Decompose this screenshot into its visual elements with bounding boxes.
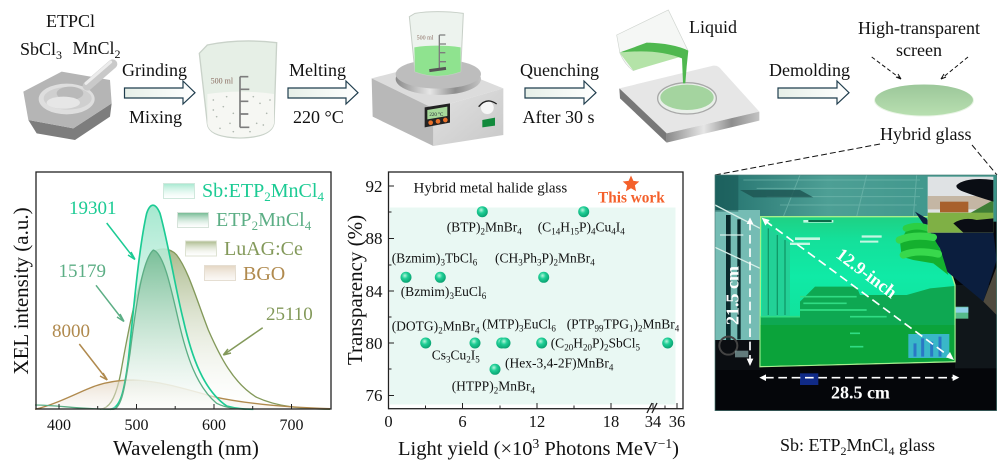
- data labels: 4: [611, 227, 616, 237]
- label: grinding: Grinding: [122, 60, 187, 80]
- arrow: demolding: [778, 81, 849, 104]
- label: hybrid glass: Hybrid glass: [880, 124, 972, 144]
- ceiling: [715, 175, 997, 222]
- x tick labels: 700: [280, 417, 304, 434]
- curve: BGO: [35, 380, 330, 409]
- data labels: 4: [475, 326, 480, 336]
- axes frame: [36, 172, 331, 409]
- data labels: (Bzmim): [392, 250, 440, 265]
- title: hybrid metal halide glass: Hybrid metal halide glass: [414, 180, 567, 196]
- x tick labels: 0: [384, 412, 393, 431]
- right dark room: [955, 285, 997, 368]
- y axis title: XEL intensity (a.u.): [9, 207, 33, 375]
- icon: pouring beaker and mold: [617, 10, 759, 143]
- panel: transparency vs light yield chart: [343, 172, 685, 460]
- arrow: quenching: [525, 81, 596, 104]
- data labels: MnBr: [443, 319, 475, 334]
- data labels: 4: [675, 323, 680, 333]
- arrow: melting: [288, 81, 358, 104]
- label: precursors: MnCl: [72, 38, 115, 58]
- x axis title: 3: [533, 436, 540, 451]
- curves: [35, 205, 330, 409]
- data labels: 15: [570, 227, 579, 237]
- arrows: value pointers: [79, 223, 263, 380]
- x tick labels: 6: [458, 412, 467, 431]
- caption: glass photo: 4: [889, 444, 895, 458]
- x ticks: [59, 404, 292, 409]
- data labels: [392, 220, 680, 396]
- label: melting: Melting: [289, 60, 346, 80]
- legend: MnCl: [258, 209, 305, 231]
- x tick labels: 600: [202, 417, 226, 434]
- x tick labels: 400: [47, 417, 71, 434]
- x tick labels: [47, 417, 304, 434]
- icon: beaker with powder: 500 ml: [211, 76, 234, 85]
- icon: hot plate with beaker: [372, 12, 503, 146]
- data labels: 5: [635, 342, 640, 352]
- data labels: TPG: [603, 316, 629, 331]
- legend: 4: [305, 218, 312, 233]
- label: quenching: Quenching: [520, 60, 599, 80]
- data labels: 3: [440, 257, 445, 267]
- label: precursors: [20, 11, 121, 62]
- callouts: intensity values: [52, 198, 313, 342]
- data labels: 6: [482, 291, 487, 301]
- data labels: (BTP): [447, 220, 480, 235]
- left wall and windows: [715, 210, 760, 343]
- data labels: SbCl: [608, 335, 636, 350]
- label: precursors: ETPCl: [46, 11, 95, 31]
- data labels: P): [542, 250, 554, 265]
- data points: [400, 206, 673, 375]
- data labels: Cs: [432, 347, 446, 362]
- label: after 30 s: After 30 s: [522, 107, 594, 127]
- data labels: 2: [466, 354, 471, 364]
- callouts: intensity values: 25110: [266, 304, 313, 325]
- legend: Sb:ETP: [202, 180, 264, 202]
- label: this work: This work: [598, 190, 665, 206]
- data labels: 3: [449, 291, 454, 301]
- legend: ETP: [216, 209, 252, 231]
- label: precursors: SbCl: [20, 39, 56, 59]
- data labels: 5: [475, 354, 480, 364]
- axes frame: [388, 172, 683, 409]
- data labels: H: [573, 335, 583, 350]
- y tick labels: 84: [366, 282, 383, 301]
- dimension labels: 21.5 cm: [722, 266, 742, 325]
- data labels: 14: [551, 227, 561, 237]
- data labels: 3: [446, 354, 451, 364]
- data labels: 2: [480, 227, 485, 237]
- inset photo: [928, 177, 993, 233]
- icon: beaker with powder: [199, 41, 277, 138]
- dimension labels: [722, 244, 901, 402]
- data labels: I: [471, 347, 476, 362]
- dimension labels: 12.9-inch: [833, 244, 901, 302]
- x axis title: Light yield (×10: [398, 438, 533, 460]
- callouts: intensity values: 19301: [69, 198, 116, 219]
- x axis title: ): [672, 438, 679, 460]
- data labels: 3: [518, 257, 523, 267]
- x tick labels: [384, 412, 685, 431]
- x axis title: Photons MeV: [539, 438, 658, 460]
- data labels: 2: [604, 342, 608, 352]
- data labels: 2: [494, 386, 498, 396]
- data labels: MnBr: [485, 220, 518, 235]
- legend: 4: [317, 189, 324, 204]
- y tick labels: [366, 177, 383, 405]
- caption: glass photo: 2: [841, 444, 847, 458]
- data labels: 20: [564, 342, 574, 352]
- data labels: (Hex-3,4-2F)MnBr: [505, 355, 609, 370]
- ticks: [388, 186, 677, 409]
- arrow heads: [747, 217, 959, 381]
- label: high-transparent screen: [858, 18, 980, 60]
- data labels: (CH: [495, 250, 518, 265]
- y tick labels: 80: [366, 334, 382, 353]
- panel: synthesis process: [20, 10, 997, 175]
- legend: BGO: [243, 263, 285, 285]
- star: this work: [623, 176, 639, 191]
- data labels: 4: [517, 227, 522, 237]
- data labels: MnBr: [558, 250, 591, 265]
- data labels: H: [560, 220, 570, 235]
- data labels: 4: [590, 257, 595, 267]
- label: high-transparent screen: screen: [896, 40, 942, 60]
- caption: glass photo: Sb: ETP: [780, 435, 841, 455]
- panel: glass photo: [715, 175, 997, 411]
- data labels: 3: [537, 257, 542, 267]
- data labels: P): [579, 220, 591, 235]
- axis break: [647, 403, 657, 413]
- legend: 2: [252, 218, 258, 233]
- icon: hot plate with beaker: 500 ml: [417, 36, 434, 42]
- data labels: (MTP): [482, 316, 519, 331]
- data labels: EuCl: [524, 316, 552, 331]
- data labels: ): [633, 316, 638, 331]
- data labels: (Bzmim): [401, 284, 449, 299]
- shaded region: [390, 208, 676, 404]
- label: liquid: Liquid: [689, 17, 737, 37]
- caption: glass photo: MnCl: [847, 435, 889, 455]
- x tick labels: 36: [669, 412, 685, 431]
- label: demolding: Demolding: [769, 60, 850, 80]
- y tick labels: 88: [366, 229, 382, 248]
- label: high-transparent screen: High-transparent: [858, 18, 980, 38]
- data labels: 1: [629, 323, 633, 333]
- caption: glass photo: glass: [895, 435, 935, 455]
- data labels: Cu: [450, 347, 466, 362]
- data labels: 6: [551, 323, 556, 333]
- x tick labels: 500: [124, 417, 148, 434]
- legend: 2: [264, 189, 271, 204]
- arrow: grinding: [124, 81, 195, 104]
- data labels: 2: [638, 323, 642, 333]
- data labels: 3: [519, 323, 524, 333]
- data labels: TbCl: [445, 250, 473, 265]
- data labels: (DOTG): [392, 319, 438, 334]
- y tick labels: 92: [366, 177, 382, 196]
- data labels: P): [592, 335, 604, 350]
- icon: hot plate with beaker: 220 °C: [429, 113, 444, 118]
- data labels: EuCl: [454, 284, 482, 299]
- data labels: 6: [473, 257, 478, 267]
- y tick labels: 76: [366, 386, 382, 405]
- data labels: MnBr: [498, 379, 531, 394]
- green glass screen: [760, 217, 955, 367]
- curve: LuAG:Ce: [100, 249, 330, 409]
- table glow: [800, 373, 818, 385]
- data labels: 2: [554, 257, 558, 267]
- x tick labels: 18: [603, 412, 619, 431]
- data labels: 2: [438, 326, 443, 336]
- data labels: MnBr: [642, 316, 675, 331]
- dimension arrows: [750, 221, 955, 378]
- data labels: I: [616, 220, 621, 235]
- panel: XEL spectra chart: [9, 172, 331, 460]
- data labels: Cu: [595, 220, 611, 235]
- data labels: 4: [591, 227, 596, 237]
- data labels: 20: [583, 342, 592, 352]
- y axis title: Transparency (%): [343, 215, 367, 365]
- data labels: 4: [620, 227, 625, 237]
- data labels: 99: [594, 323, 604, 333]
- icon: hybrid glass disc: [874, 84, 974, 116]
- label: temperature: 220 °C: [293, 107, 344, 127]
- callout lines to photo: [715, 144, 997, 175]
- callouts: intensity values: 15179: [58, 261, 106, 282]
- data labels: (C: [551, 335, 564, 350]
- label: precursors: 3: [56, 48, 62, 62]
- legend: MnCl: [271, 180, 318, 202]
- x axis title: Wavelength (nm): [113, 436, 259, 460]
- x axis title: −1: [658, 436, 672, 451]
- callouts: intensity values: 8000: [52, 321, 90, 342]
- data labels: 4: [530, 386, 535, 396]
- x tick labels: 34: [645, 412, 661, 431]
- curve: ETP2MnCl4: [35, 250, 247, 409]
- glove hand: [915, 212, 997, 302]
- data labels: 4: [609, 362, 614, 372]
- label: precursors: 2: [115, 47, 121, 61]
- arrows: screen pointers: [872, 57, 968, 79]
- legend: [164, 180, 324, 285]
- screen interior: [762, 223, 790, 317]
- data labels: (PTP: [567, 316, 594, 331]
- data labels: (C: [538, 220, 551, 235]
- curve: Sb:ETP2MnCl4: [110, 205, 253, 409]
- legend: LuAG:Ce: [224, 238, 303, 260]
- x tick labels: 12: [529, 412, 545, 431]
- icon: mortar and pestle: [23, 62, 113, 140]
- data labels: Ph: [523, 250, 537, 265]
- data labels: (HTPP): [452, 379, 494, 394]
- dimension labels: 28.5 cm: [831, 382, 890, 402]
- label: mixing: Mixing: [129, 107, 182, 127]
